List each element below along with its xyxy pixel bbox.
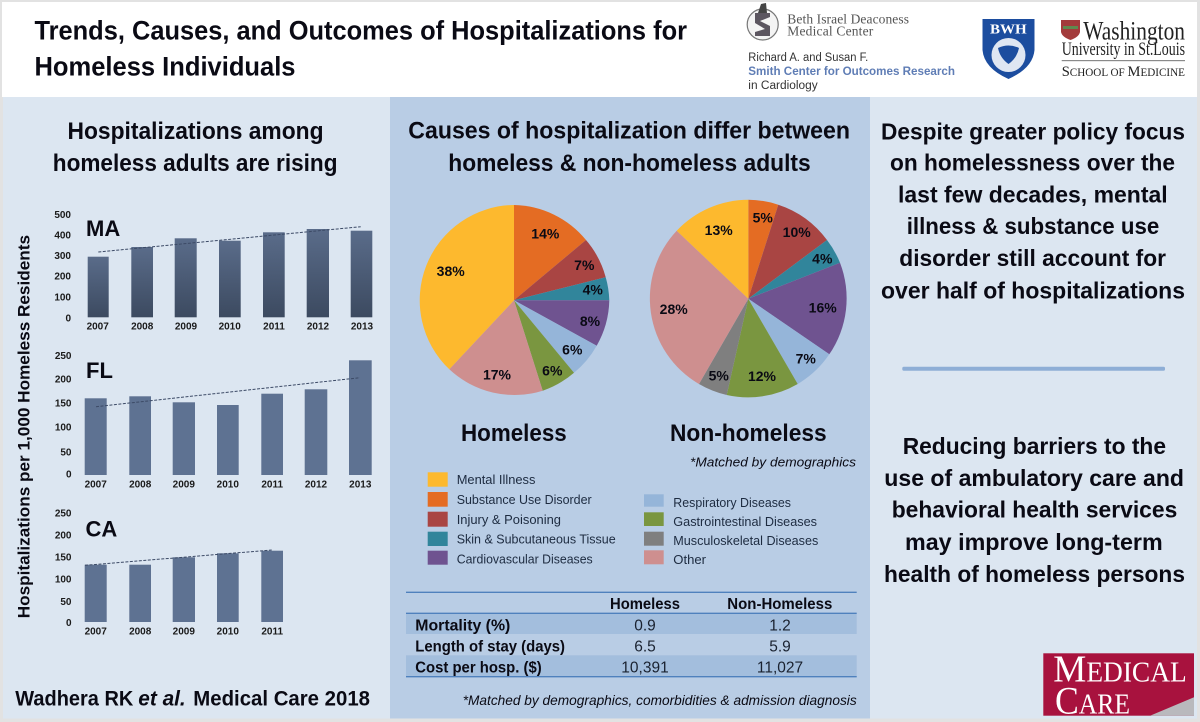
logo: Beth Israel Deaconess Medical Center: Beth Israel Deaconess xyxy=(787,12,909,26)
heading: hospitalizations rising: Hospitalizations among xyxy=(68,118,324,145)
logo: Medical Care: MEDICAL xyxy=(1053,649,1187,691)
panel: header xyxy=(34,3,1185,92)
bar chart: MA: 100 xyxy=(54,293,71,304)
bar chart: MA: 200 xyxy=(54,272,71,283)
bar chart: MA: 2010 xyxy=(219,322,241,333)
logo: Beth Israel Deaconess Medical Center: Medical Center xyxy=(787,24,874,39)
bar chart: FL: 2007 xyxy=(85,479,107,490)
text: policy focus: illness & substance use xyxy=(907,213,1159,239)
bar chart: FL xyxy=(55,351,372,490)
bar chart: FL: 0 xyxy=(66,470,72,481)
text: reducing barriers: use of ambulatory care and xyxy=(884,465,1184,491)
bar chart: CA xyxy=(55,508,283,637)
state label: FL: FL xyxy=(86,358,113,383)
outcomes table: Cost per hosp. ($) xyxy=(415,660,542,677)
outcomes table: Mortality (%) xyxy=(415,618,510,635)
panel: causes xyxy=(390,97,870,718)
y axis title: Hospitalizations per 1,000 Homeless Residents xyxy=(14,235,33,618)
text: policy focus xyxy=(881,118,1185,303)
pie label: non-homeless: Non-homeless xyxy=(670,420,827,447)
heading: causes differ: Causes of hospitalization differ between xyxy=(408,117,850,144)
pie chart: homeless: 17% xyxy=(483,366,512,382)
text: policy focus: last few decades, mental xyxy=(898,181,1168,207)
text: policy focus: disorder still account for xyxy=(899,245,1166,271)
text: reducing barriers xyxy=(884,433,1185,587)
bar chart: CA: 50 xyxy=(60,597,72,608)
bar chart: CA: 250 xyxy=(55,508,72,519)
bar chart: CA: 2011 xyxy=(261,626,283,637)
heading: hospitalizations rising: homeless adults are rising xyxy=(53,150,338,177)
bar chart: CA: 2008 xyxy=(129,626,152,637)
pie chart: homeless: 38% xyxy=(437,263,465,279)
bar chart: MA: 0 xyxy=(65,313,71,324)
outcomes table: Length of stay (days) xyxy=(415,639,565,656)
bar chart: FL: 2009 xyxy=(173,479,195,490)
heading: causes differ: homeless & non-homeless adults xyxy=(448,150,811,177)
outcomes table: 5.9 xyxy=(769,639,791,656)
bar chart: CA: 0 xyxy=(66,618,72,629)
logo: Beth Israel Deaconess Medical Center: Smith Center for Outcomes Research xyxy=(748,66,955,78)
bar chart: FL: 100 xyxy=(55,423,72,434)
pie chart: non-homeless: 12% xyxy=(748,368,777,384)
bar chart: FL: 2013 xyxy=(349,479,372,490)
legend: Substance Use Disorder xyxy=(457,492,592,507)
pie chart: non-homeless xyxy=(650,200,847,397)
state label: MA: MA xyxy=(86,216,120,241)
legend: Cardiovascular Diseases xyxy=(457,552,593,567)
legend: Injury & Poisoning xyxy=(457,512,561,527)
text: reducing barriers: may improve long-term xyxy=(905,529,1163,555)
bar chart: FL: 50 xyxy=(60,447,72,458)
bar chart: MA: 2012 xyxy=(307,322,330,333)
citation: Wadhera RK xyxy=(15,688,133,711)
logo: BWH shield xyxy=(982,19,1034,79)
title: Trends, Causes, and Outcomes of Hospitalizations for xyxy=(34,16,687,46)
pie chart: non-homeless: 10% xyxy=(783,224,811,240)
pie chart: homeless: 6% xyxy=(562,341,583,357)
heading: hospitalizations rising xyxy=(53,118,338,177)
pie chart: non-homeless: 4% xyxy=(812,250,833,266)
pie label: homeless: Homeless xyxy=(461,420,567,447)
note: matched by demographics, comorbidities and admission diagnosis: *Matched by demographics, comorbidities & admission diagnosis xyxy=(463,692,857,708)
title xyxy=(34,16,687,82)
bar chart: MA: 2007 xyxy=(87,322,109,333)
bar chart: FL: 2011 xyxy=(261,479,283,490)
bar chart: MA: 2011 xyxy=(263,322,285,333)
logo: BWH shield: BWH xyxy=(990,22,1027,38)
bar chart: CA: 100 xyxy=(55,575,72,586)
legend: Musculoskeletal Diseases xyxy=(673,533,819,548)
text: policy focus: over half of hospitalizations xyxy=(881,277,1185,303)
bar chart: MA: 400 xyxy=(54,230,71,241)
legend: Mental Illness xyxy=(457,472,536,487)
citation: et al. xyxy=(138,688,186,711)
bar chart: CA: 200 xyxy=(55,531,72,542)
bar chart: FL: 2012 xyxy=(305,479,328,490)
pie chart: non-homeless: 5% xyxy=(753,209,773,225)
text: reducing barriers: Reducing barriers to the xyxy=(903,433,1166,459)
panel: conclusions xyxy=(870,97,1197,722)
heading: causes differ xyxy=(408,117,850,177)
text: policy focus: on homelessness over the xyxy=(890,150,1175,176)
pie chart: non-homeless: 13% xyxy=(705,222,733,238)
pie chart: non-homeless: 5% xyxy=(709,367,729,383)
legend: Other xyxy=(673,552,707,567)
outcomes table: 6.5 xyxy=(634,639,656,656)
legend: Gastrointestinal Diseases xyxy=(673,514,817,529)
pie chart: non-homeless: 28% xyxy=(660,301,688,317)
bar chart: FL: 2008 xyxy=(129,479,152,490)
bar chart: MA: 2009 xyxy=(175,322,198,333)
bar chart: FL: 2010 xyxy=(217,479,239,490)
bar chart: FL: 150 xyxy=(55,399,72,410)
pie chart: homeless: 14% xyxy=(531,225,560,241)
pie chart: homeless xyxy=(420,205,609,395)
citation: Medical Care 2018 xyxy=(193,688,370,711)
pie chart: homeless: 4% xyxy=(583,281,603,297)
logo: Beth Israel Deaconess Medical Center: in Cardiology xyxy=(748,80,818,92)
bar chart: MA: 2008 xyxy=(131,322,154,333)
logo: Medical Care xyxy=(1043,649,1194,722)
bar chart: MA: 300 xyxy=(54,251,71,262)
bar chart: FL: 200 xyxy=(55,375,72,386)
bar chart: FL: 250 xyxy=(55,351,72,362)
state label: CA: CA xyxy=(86,517,117,542)
bar chart: CA: 2009 xyxy=(173,626,195,637)
logo: Medical Care: CARE xyxy=(1055,679,1130,722)
text: policy focus: Despite greater policy focus xyxy=(881,118,1185,144)
pie chart: homeless: 7% xyxy=(574,257,595,273)
outcomes table: 1.2 xyxy=(769,618,791,635)
text: reducing barriers: health of homeless persons xyxy=(884,561,1185,587)
outcomes table xyxy=(406,592,857,677)
text: reducing barriers: behavioral health services xyxy=(892,497,1177,523)
logo: Washington University in St. Louis School of Medicine: SCHOOL OF MEDICINE xyxy=(1062,64,1185,80)
pie chart: homeless: 8% xyxy=(580,313,601,329)
pie chart: non-homeless: 16% xyxy=(809,299,837,315)
legend xyxy=(428,472,819,567)
citation xyxy=(15,688,370,711)
bar chart: CA: 2007 xyxy=(85,626,107,637)
outcomes table: 0.9 xyxy=(634,618,656,635)
note: matched by demographics: *Matched by demographics xyxy=(690,454,857,470)
bar chart: CA: 2010 xyxy=(217,626,239,637)
outcomes table: Homeless xyxy=(610,596,680,613)
legend: Respiratory Diseases xyxy=(673,495,791,510)
outcomes table: 11,027 xyxy=(757,660,803,677)
panel: trends xyxy=(3,97,390,718)
outcomes table: Non-Homeless xyxy=(727,596,832,613)
pie chart: homeless: 6% xyxy=(542,362,563,378)
bar chart: MA: 500 xyxy=(54,210,71,221)
bar chart: MA: 2013 xyxy=(351,322,374,333)
outcomes table: 10,391 xyxy=(621,660,669,677)
logo: Beth Israel Deaconess Medical Center: Richard A. and Susan F. xyxy=(748,52,868,64)
logo: Washington University in St. Louis School of Medicine xyxy=(1061,16,1185,80)
logo: Beth Israel Deaconess Medical Center xyxy=(747,3,955,92)
bar chart: CA: 150 xyxy=(55,552,72,563)
pie chart: non-homeless: 7% xyxy=(796,351,816,367)
legend: Skin & Subcutaneous Tissue xyxy=(457,532,616,547)
title: Homeless Individuals xyxy=(34,52,296,82)
bar chart: MA xyxy=(54,210,374,333)
